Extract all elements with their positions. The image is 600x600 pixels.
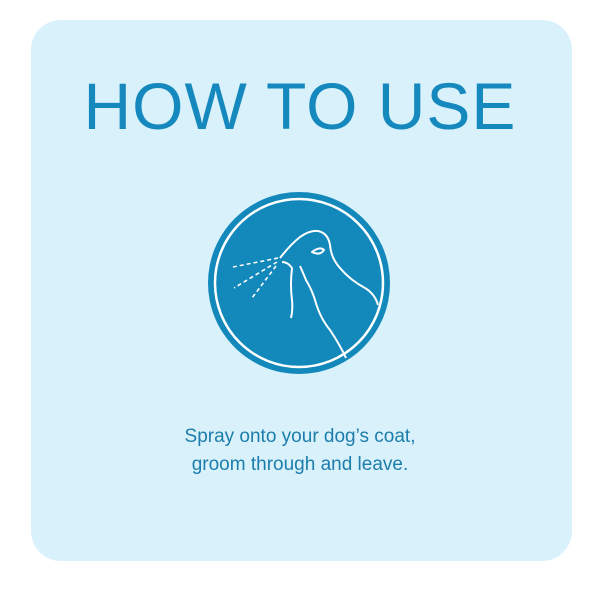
text block: instructions: Spray onto your dog’s coat, (185, 426, 415, 447)
text block: instructions: groom through and leave. (192, 454, 408, 475)
title: HOW TO USE (84, 69, 516, 143)
text block: instructions (185, 426, 415, 475)
